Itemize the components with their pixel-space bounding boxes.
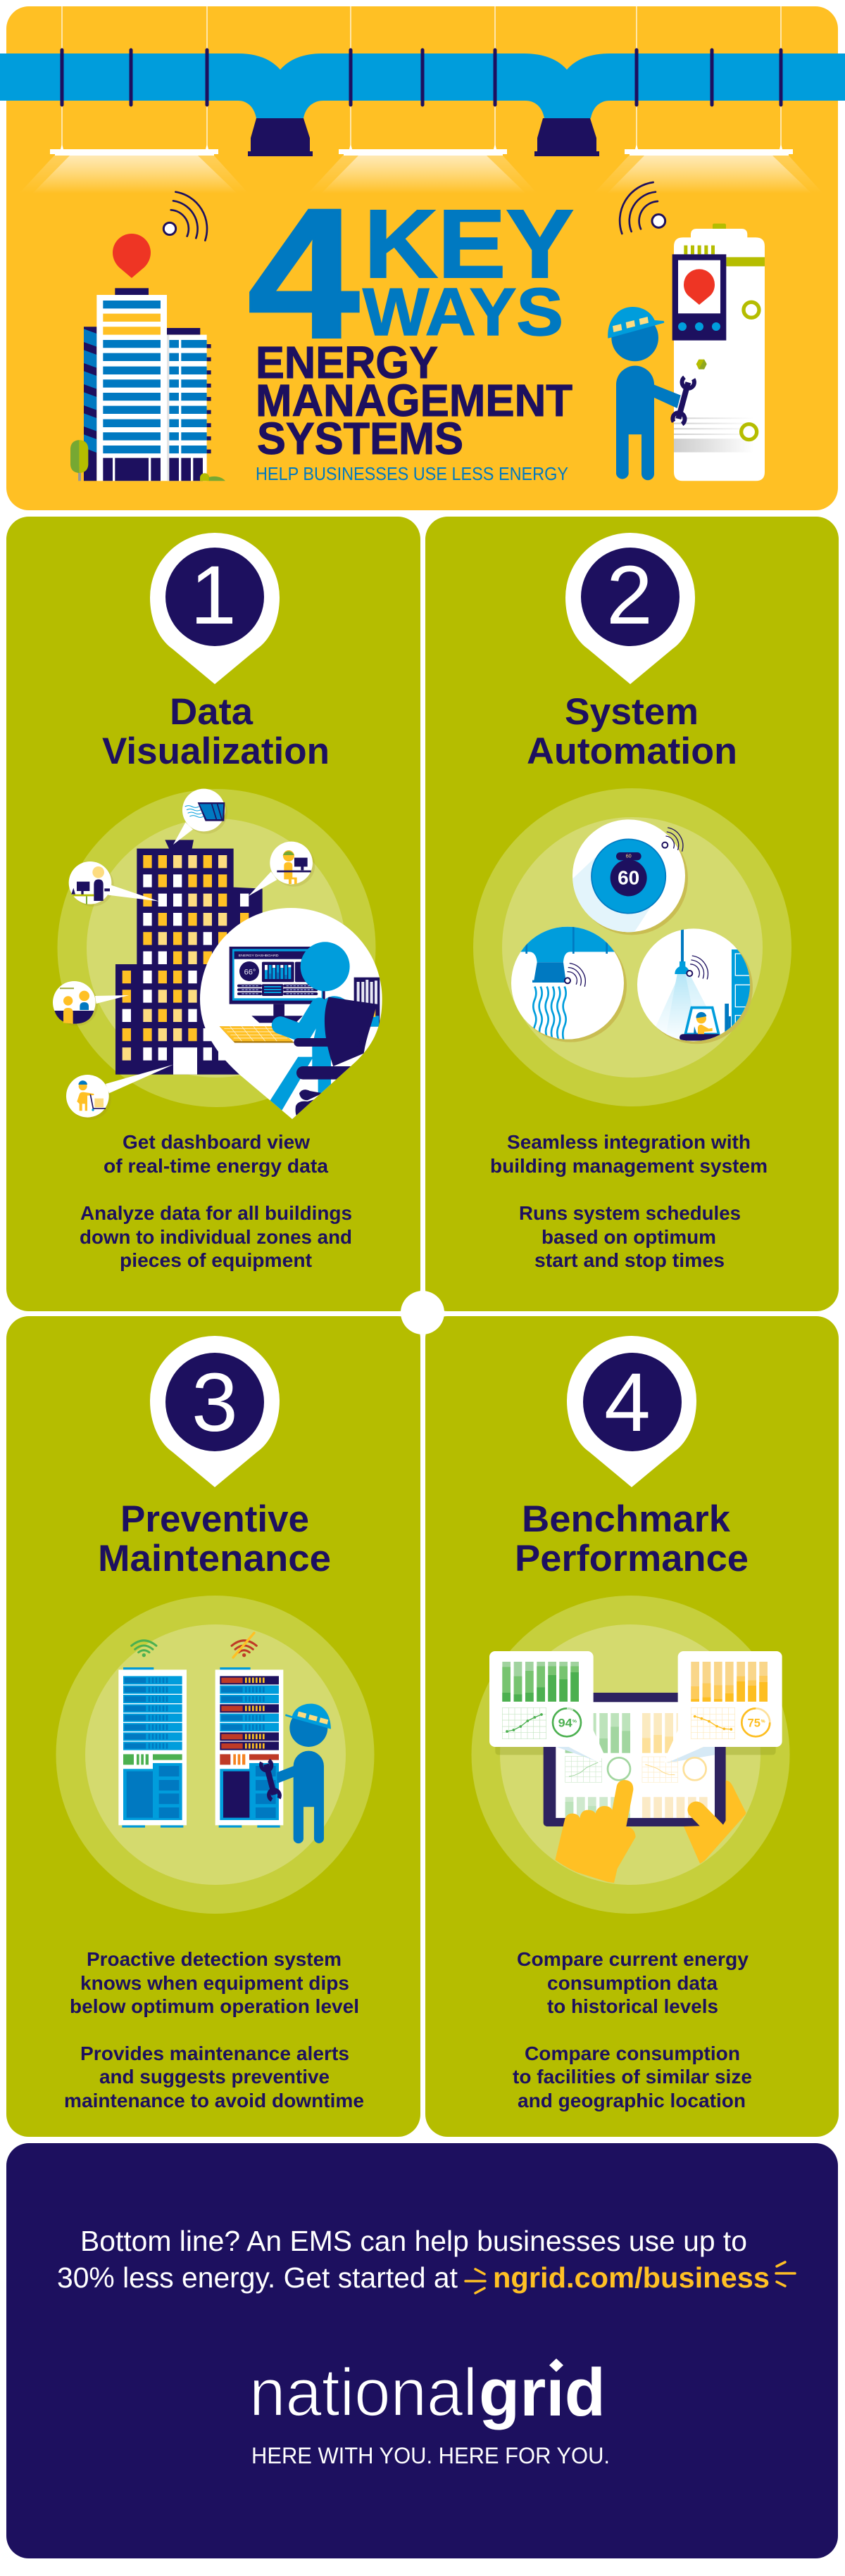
storage racks (354, 978, 380, 1027)
logo: national grid: national (249, 2355, 477, 2430)
illustration: connected systems (473, 788, 791, 1106)
popup: green performance (489, 1651, 604, 1762)
title: 4 key ways: KEY (364, 190, 574, 298)
circle: thermostat (572, 819, 688, 945)
callout: office worker left (69, 861, 159, 907)
body text: Proactive detection system (87, 1948, 342, 1970)
body text: below optimum operation level (70, 1995, 359, 2017)
center notch (401, 1291, 444, 1334)
cabinet with alerts (215, 1667, 283, 1828)
icon: sparks around link (465, 2262, 795, 2293)
illustration: worker at control unit (608, 182, 765, 481)
panel: header (0, 6, 845, 510)
dashboard monitor: ENERGY DASHBOARD (239, 954, 279, 958)
panel: 2 system automation (425, 517, 839, 1311)
body text: Analyze data for all buildings (80, 1202, 352, 1224)
logo: national grid: grid (479, 2355, 606, 2430)
body text (64, 1948, 364, 2111)
bottom line text: 30% less energy. Get started at (57, 2261, 458, 2294)
title: energy management systems: SYSTEMS (257, 413, 463, 464)
heading: Maintenance (98, 1538, 331, 1579)
body text: building management system (490, 1155, 768, 1177)
heading (515, 1498, 749, 1579)
title: 4 key ways: WAYS (363, 274, 563, 350)
subtitle: HELP BUSINESSES USE LESS ENERGY (256, 463, 568, 484)
number pin 2 (565, 533, 695, 684)
illustration: office building with wifi and pin (70, 192, 225, 481)
body text: consumption data (547, 1972, 718, 1994)
icon: wifi signal (565, 964, 585, 986)
body text: Seamless integration with (507, 1131, 751, 1153)
keyboard (220, 1026, 294, 1043)
tagline: HERE WITH YOU. HERE FOR YOU. (251, 2443, 610, 2468)
ceiling lights (19, 6, 823, 194)
panel: footer call to action (6, 2143, 838, 2558)
icon: wifi ok (132, 1641, 156, 1657)
heading: Visualization (102, 731, 330, 772)
duct with vents (0, 50, 845, 156)
icon: wifi signal (620, 182, 665, 234)
circle: lighting and cabin (637, 928, 753, 1044)
body text (513, 1948, 752, 2111)
building with windows (115, 840, 263, 1075)
body text: down to individual zones and (80, 1226, 352, 1248)
heading (102, 691, 330, 772)
body text: based on optimum (542, 1226, 716, 1248)
heading: Data (170, 691, 254, 733)
hands (554, 1780, 746, 1884)
number pin 3 (150, 1336, 280, 1487)
body text: to historical levels (547, 1995, 718, 2017)
body text: Provides maintenance alerts (80, 2043, 349, 2064)
popup shadows (495, 1747, 776, 1755)
dashboard monitor: 66° (244, 968, 256, 976)
operator at desk (270, 942, 377, 1119)
number pin 3: 3 (192, 1356, 238, 1449)
bottom line text: Bottom line? An EMS can help businesses use up to (80, 2225, 747, 2257)
body text: maintenance to avoid downtime (64, 2090, 364, 2111)
body text: pieces of equipment (120, 1249, 312, 1271)
icon: wifi signal (662, 828, 683, 851)
callout: lobby people (53, 981, 129, 1026)
callout: office worker right (249, 842, 315, 896)
circle: hvac vent (509, 927, 627, 1042)
body text: to facilities of similar size (513, 2066, 752, 2088)
illustration: building dashboard (53, 789, 382, 1120)
bottom line text (57, 2225, 747, 2294)
logo: national grid (249, 2355, 606, 2430)
worker with wrench (261, 1704, 331, 1843)
title: 4 key ways: 4 (248, 170, 361, 377)
callout: rooftop solar unit (173, 789, 227, 845)
number pin 1 (150, 533, 280, 684)
title: 4 key ways (248, 170, 574, 377)
body text: knows when equipment dips (80, 1972, 349, 1994)
panel: 4 benchmark performance (425, 1316, 839, 2137)
body text: and geographic location (518, 2090, 746, 2111)
heading: Automation (527, 731, 737, 772)
popup: green performance: 94 (558, 1716, 572, 1729)
icon: wifi signal (687, 956, 708, 979)
healthy cabinet (118, 1667, 187, 1828)
heading: Benchmark (522, 1498, 731, 1540)
popup: yellow performance (664, 1651, 782, 1763)
title: energy management systems: MANAGEMENT (256, 375, 572, 426)
title: energy management systems: ENERGY (256, 337, 438, 388)
illustration: tablet benchmarks (472, 1596, 790, 1914)
body text (490, 1131, 768, 1271)
body text: start and stop times (534, 1249, 725, 1271)
heading: Preventive (120, 1498, 309, 1540)
illustration: equipment cabinets (56, 1596, 375, 1914)
heading: Performance (515, 1538, 749, 1579)
body text: Runs system schedules (519, 1202, 741, 1224)
icon: wifi signal (163, 192, 207, 241)
circle: thermostat: 60 (626, 852, 632, 859)
body text (80, 1131, 352, 1271)
popup: yellow performance: % (761, 1719, 765, 1724)
popup: green performance: % (572, 1719, 577, 1724)
body text: Compare consumption (525, 2043, 740, 2064)
icon: red map pin (113, 234, 151, 278)
number pin 2: 2 (606, 549, 653, 642)
body text: of real-time energy data (104, 1155, 328, 1177)
dashboard monitor (230, 947, 325, 1023)
panel: 1 data visualization (6, 517, 420, 1311)
body text: Get dashboard view (123, 1131, 310, 1153)
title: energy management systems (256, 337, 572, 464)
tablet (544, 1693, 726, 1826)
circle: thermostat: 60 (618, 867, 639, 889)
callout: dashboard operator (200, 908, 382, 1119)
heading (527, 691, 737, 772)
number pin 1: 1 (190, 549, 237, 642)
link text: ngrid.com/business (493, 2261, 770, 2294)
callout: delivery worker (66, 1065, 173, 1120)
popup: yellow performance: 75 (748, 1716, 760, 1729)
number pin 4 (567, 1336, 696, 1487)
heading (98, 1498, 331, 1579)
panel: 3 preventive maintenance (6, 1316, 420, 2137)
body text: and suggests preventive (99, 2066, 330, 2088)
heading: System (565, 691, 699, 733)
number pin 4: 4 (604, 1356, 651, 1449)
icon: wifi fault (232, 1633, 256, 1658)
body text: Compare current energy (517, 1948, 749, 1970)
